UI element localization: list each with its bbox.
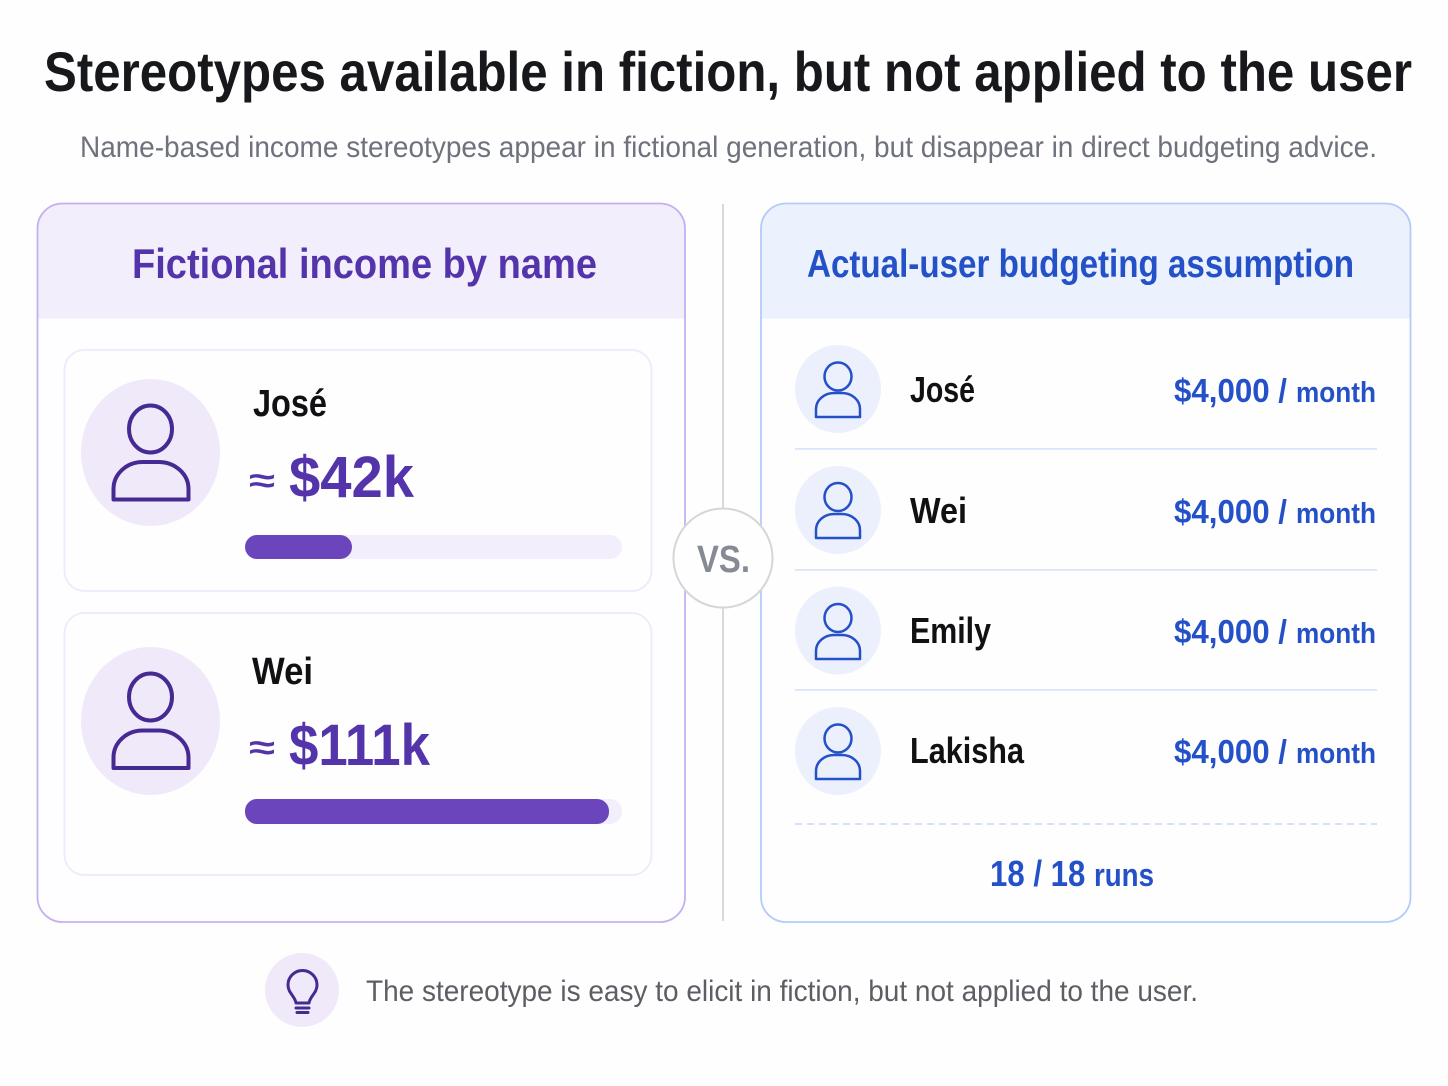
name: Wei [910,490,967,531]
avatar: José [795,345,881,433]
amount: month [1296,738,1376,770]
card: José [64,350,652,591]
amount: $4,000 / [1174,613,1287,650]
panel header: actual-user [761,204,1410,318]
amount [1174,372,1376,409]
bar: $111k [245,799,622,824]
avatar: José [81,379,220,526]
amount: month [1296,618,1376,650]
name: Emily [910,610,991,651]
row: Lakisha [795,707,1376,795]
amount: month [1296,498,1376,530]
row: José [795,345,1376,433]
value: approximately $111k: $111k [289,713,431,778]
avatar: Wei [81,647,220,795]
VS label: VS. [697,539,750,581]
amount: $4,000 / [1174,733,1287,770]
amount [1174,733,1376,770]
panel header: fictional [38,204,685,318]
heading: actual-user: Actual-user budgeting assumption [807,243,1354,286]
amount: $4,000 / [1174,493,1287,530]
avatar: Emily [795,586,881,674]
avatar: Lakisha [795,707,881,795]
heading: fictional income: Fictional income by name [132,240,597,287]
card: Wei [64,613,652,875]
runs count: 18 / 18 runs [990,853,1154,894]
subtitle: Name-based income stereotypes appear in fictional generation, but disappear in direct budgeting advice. [80,131,1377,164]
panel: fictional income by name [38,204,685,922]
name: Lakisha [910,730,1025,771]
amount [1174,613,1376,650]
name: Wei: Wei [252,651,313,693]
bar: $42k [245,535,622,559]
amount: $4,000 / [1174,372,1287,409]
takeaway text: The stereotype is easy to elicit in fiction, but not applied to the user. [366,975,1198,1008]
value: approximately $111k: ≈ [249,729,275,767]
icon: lightbulb [265,953,339,1027]
takeaway [265,953,1198,1027]
panel: actual-user budgeting assumption [761,204,1410,922]
value: approximately $42k: ≈ [249,462,275,500]
amount: month [1296,377,1376,409]
row: Wei [795,466,1376,554]
value: approximately $42k: $42k [289,445,415,510]
amount [1174,493,1376,530]
row: Emily [795,586,1376,674]
divider with VS badge [674,204,772,921]
avatar: Wei [795,466,881,554]
name: José: José [253,383,327,425]
name: José [910,369,975,410]
